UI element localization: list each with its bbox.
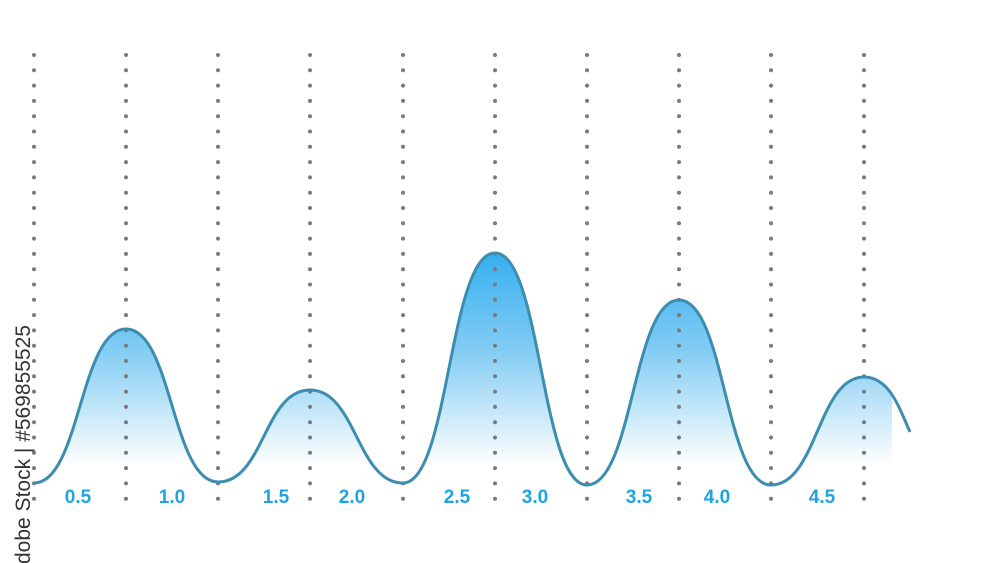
axis labels: 4.5 [809,487,836,508]
area fill [64,254,892,458]
axis labels: 0.5 [65,487,92,508]
axis labels: 2.5 [444,487,471,508]
axis labels: 3.5 [626,487,653,508]
curve line [34,253,910,485]
axis labels: 1.5 [263,487,290,508]
axis labels: 1.0 [159,487,185,508]
axis labels [65,487,836,508]
gridlines: dotted verticals [34,55,864,505]
axis labels: 2.0 [339,487,365,508]
axis labels: 3.0 [522,487,548,508]
axis labels: 4.0 [704,487,730,508]
